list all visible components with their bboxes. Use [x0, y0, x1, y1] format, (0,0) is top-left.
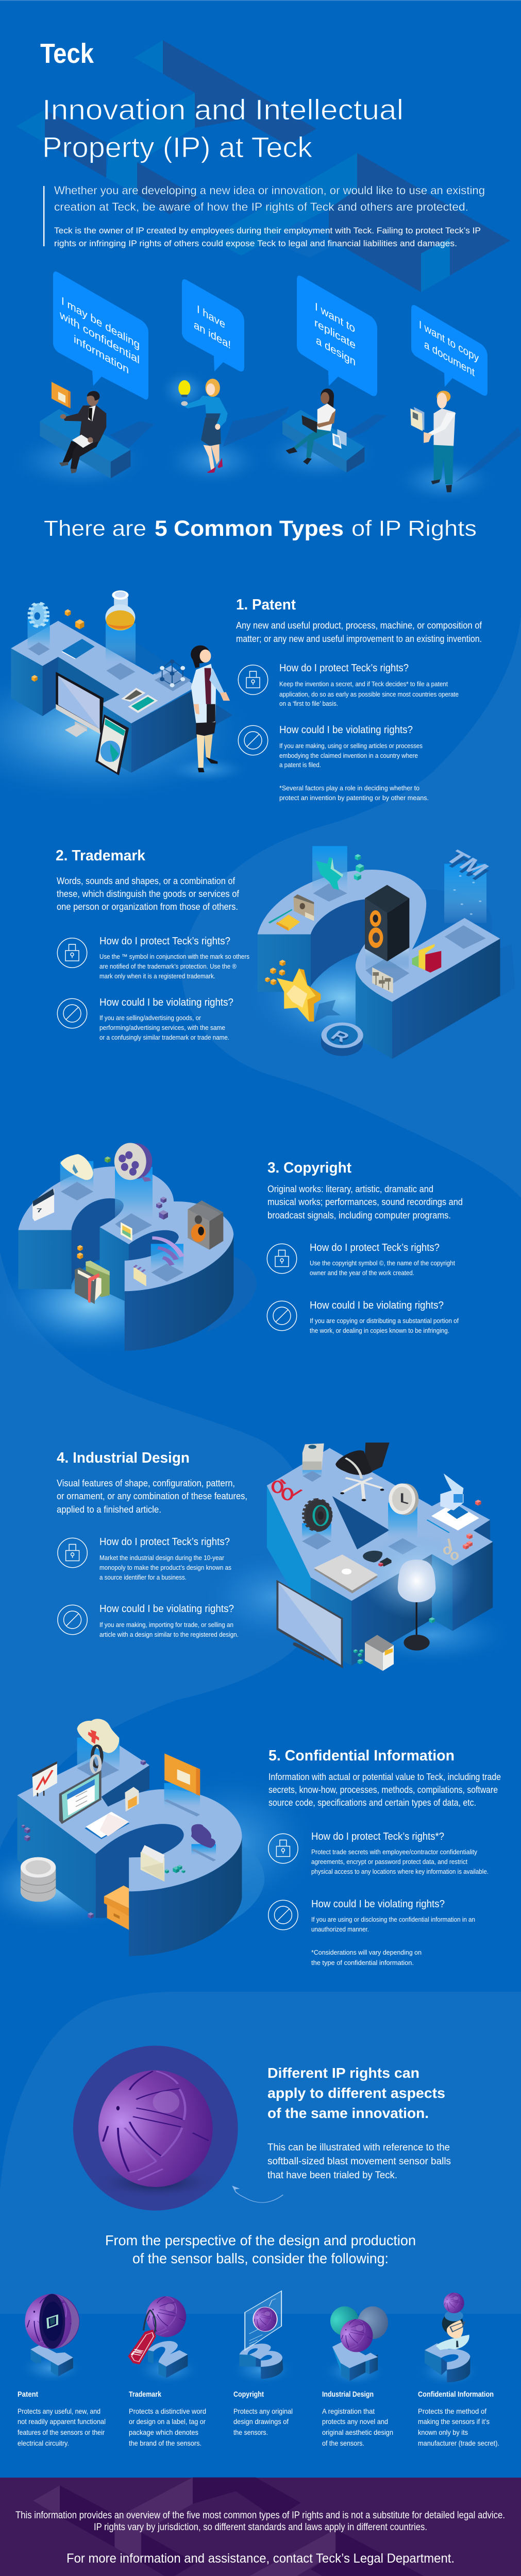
violate text: If you are making, importing for trade, or selling an — [99, 1621, 233, 1629]
icon: prohibited — [267, 1301, 297, 1331]
cubes — [355, 854, 361, 860]
panel: footer — [0, 2478, 521, 2576]
protect text: physical access to any locations where key information is available. — [311, 1868, 489, 1875]
confidential description: source code, specifications and certain types of data, etc. — [268, 1798, 476, 1808]
tablet chart — [95, 715, 129, 775]
copyright heading: 3. Copyright — [267, 1160, 351, 1176]
intro text block: creation at Teck, be aware of how the IP rights of Teck and others are protected. — [54, 200, 468, 213]
registered coin: R — [327, 1029, 354, 1047]
mixer — [372, 967, 393, 993]
protect text: How do I protect Teck’s rights*? — [311, 1831, 444, 1842]
confidential heading: 5. Confidential Information — [268, 1748, 455, 1764]
column: trademark: or design on a label, tag or — [129, 2417, 206, 2426]
violate text — [99, 1603, 239, 1638]
sensor ball illustration — [73, 2046, 238, 2211]
numeral 4 with three balls — [330, 2307, 388, 2381]
confidential footnote — [311, 1948, 422, 1967]
panel: four people with speech bubbles — [10, 272, 521, 503]
floor lamp — [416, 1602, 417, 1638]
puzzle piece — [191, 1824, 215, 1848]
patent footnote — [279, 784, 429, 802]
protect text: on a ‘first to file’ basis. — [279, 700, 338, 707]
teal cubes — [165, 1869, 169, 1873]
molecule — [162, 660, 183, 685]
numeral and ball illustrations — [20, 2291, 480, 2386]
intro text block: rights or infringing IP rights of others could expose Teck to legal and financial liabilities and damages. — [54, 239, 457, 248]
panel: five IP types applied to ball — [18, 2291, 499, 2447]
protect text: How do I protect Teck’s rights? — [99, 936, 230, 947]
section heading: 5 common types — [44, 516, 477, 541]
speaker — [365, 885, 409, 913]
violate text: How could I be violating rights? — [311, 1899, 445, 1910]
protect text: a source identifier for a business. — [99, 1574, 187, 1581]
copyright illustration: 7 — [37, 1208, 42, 1214]
top strip — [0, 0, 521, 1]
violate text — [311, 1899, 475, 1933]
column: trademark: Protects a distinctive word — [129, 2407, 206, 2415]
cubes — [65, 609, 71, 616]
bubble 3: I want to — [315, 300, 355, 335]
copyright description — [267, 1184, 463, 1221]
column: patent: features of the sensors or their — [18, 2428, 105, 2436]
purple cubes — [141, 1760, 146, 1765]
industrial design description: Visual features of shape, configuration, pattern, — [57, 1478, 235, 1488]
confidential footnote: the type of confidential information. — [311, 1959, 414, 1967]
woman with idea — [178, 380, 190, 396]
picture — [121, 1222, 132, 1241]
column: industrial design: of the sensors. — [322, 2439, 364, 2447]
violate text: the work, or dealing in copies known to be infringing. — [310, 1327, 449, 1334]
violate text: How could I be violating rights? — [279, 724, 413, 736]
column: trademark: the brand of the sensors. — [129, 2439, 201, 2447]
database — [21, 1868, 56, 1902]
industrial design heading: 4. Industrial Design — [57, 1450, 190, 1466]
violate text: If you are copying or distributing a substantial portion of — [310, 1317, 459, 1325]
trademark description: these, which distinguish the goods or services of — [57, 889, 240, 899]
column: industrial design: protects any novel and — [322, 2417, 388, 2426]
violate text: article with a design similar to the registered design. — [99, 1631, 239, 1638]
protect text: Market the industrial design during the 10-year — [99, 1554, 224, 1562]
protect text — [99, 936, 249, 980]
archive box — [104, 1886, 129, 1908]
column: trademark — [129, 2391, 206, 2447]
column: confidential information: known only by its — [418, 2428, 468, 2436]
trademark description: Words, sounds and shapes, or a combination of — [57, 876, 236, 886]
violate text: a patent is filed. — [279, 761, 321, 769]
intro text block — [43, 184, 485, 248]
industrial design description: or ornament, or any combination of these features, — [57, 1491, 247, 1501]
icon: lock — [57, 938, 87, 968]
confidential description — [268, 1772, 501, 1808]
icon: lock — [238, 665, 268, 694]
bubble 3: replicate — [314, 316, 356, 352]
dark gear — [304, 1499, 331, 1531]
protect text: owner and the year of the work created. — [310, 1269, 414, 1277]
logo: Teck: Teck — [40, 38, 94, 69]
panel: copyright — [0, 1143, 463, 1356]
copyright illustration — [0, 1143, 257, 1356]
numeral 2 with tag — [128, 2296, 188, 2378]
registered coin: R — [327, 1027, 354, 1045]
chair — [364, 1443, 390, 1475]
panel: patent — [0, 590, 482, 804]
TM block letters: TM — [439, 846, 495, 880]
scientist — [197, 734, 205, 768]
copyright description: musical works; performances, sound recordings and — [267, 1197, 463, 1207]
microscope — [431, 1503, 479, 1531]
code window — [32, 1189, 54, 1221]
violate text — [99, 997, 233, 1041]
column: confidential information — [418, 2391, 499, 2447]
copyright description: Original works: literary, artistic, dramatic and — [267, 1184, 433, 1194]
column: industrial design: original aesthetic design — [322, 2428, 393, 2436]
column: confidential information: making the sensors if it’s — [418, 2417, 490, 2426]
purple cubes — [160, 1197, 166, 1203]
bubble 3: a design — [316, 333, 356, 368]
industrial design illustration — [199, 1443, 512, 1671]
icon: prohibited — [58, 1605, 87, 1635]
protect text: monopoly to make the product’s design known as — [99, 1564, 231, 1571]
protect text: agreements, encrypt or password protect data, and restrict — [311, 1858, 467, 1866]
panel: trademark — [56, 846, 515, 1059]
explanation text — [267, 2142, 451, 2181]
bar chart blocks — [412, 955, 418, 967]
column: trademark: package which denotes — [129, 2428, 198, 2436]
perspective statement: of the sensor balls, consider the following: — [132, 2250, 389, 2266]
violate text: If you are making, using or selling articles or processes — [279, 742, 423, 750]
column: industrial design — [322, 2391, 393, 2447]
book — [62, 639, 95, 658]
protect text: mark only when it is a registered trademark. — [99, 973, 215, 980]
envelope — [52, 382, 71, 409]
bubble 2: an idea! — [194, 318, 231, 351]
man in suit — [62, 441, 83, 463]
chain — [91, 1745, 102, 1773]
confidential information illustration — [0, 1719, 319, 1956]
column: confidential information: Protects the method of — [418, 2407, 486, 2415]
section heading: 5 common types: There are — [44, 516, 146, 541]
column: trademark: Trademark — [129, 2391, 162, 2399]
perspective statement: From the perspective of the design and production — [105, 2232, 416, 2248]
patent description: Any new and useful product, process, machine, or composition of — [236, 620, 482, 631]
glasses — [273, 1480, 301, 1500]
violate text: performing/advertising services, with the same — [99, 1024, 225, 1031]
teal star — [316, 857, 343, 890]
column: copyright — [233, 2391, 293, 2436]
arrow — [232, 2185, 283, 2202]
bubble 1 — [53, 272, 148, 400]
protect text — [279, 663, 459, 707]
bubble 3 — [297, 276, 377, 396]
patent heading: 1. Patent — [236, 597, 296, 613]
column: patent: Protects any useful, new, and — [18, 2407, 100, 2415]
bubble 4 — [411, 305, 488, 396]
monitor — [75, 721, 87, 732]
disclaimer: IP rights vary by jurisdiction, so different standards and laws apply in different countries. — [94, 2522, 427, 2533]
numeral 2 with tag: TM — [128, 2348, 147, 2357]
patent footnote: *Several factors play a role in deciding whether to — [279, 784, 419, 792]
man with document — [414, 407, 424, 430]
jug — [302, 1444, 324, 1470]
title — [42, 93, 404, 163]
protect text: Use the ™ symbol in conjunction with the mark so others — [99, 953, 249, 960]
background wave: example — [0, 1992, 521, 2314]
trademark heading: 2. Trademark — [56, 848, 146, 864]
column: copyright: Copyright — [233, 2391, 264, 2399]
bubble 1: information — [74, 332, 129, 376]
open book — [85, 1812, 129, 1839]
bench 3 — [282, 410, 364, 461]
column: copyright: Protects any original — [233, 2407, 293, 2415]
protect text: Keep the invention a secret, and if Teck decides* to file a patent — [279, 681, 448, 688]
protect text — [310, 1242, 455, 1277]
icon: prohibited — [57, 998, 87, 1028]
title: Innovation and Intellectual — [42, 93, 404, 126]
violate text: unauthorized manner. — [311, 1926, 369, 1933]
column: patent — [18, 2391, 106, 2447]
column: industrial design: A registration that — [322, 2407, 375, 2415]
heading: different IP rights: of the same innovation. — [267, 2105, 429, 2121]
panel: industrial design — [57, 1443, 512, 1671]
bubble 2 — [182, 279, 244, 371]
bubble 4: I want to copy — [419, 318, 479, 365]
grey speaker — [188, 1200, 223, 1221]
violate text: If you are selling/advertising goods, or — [99, 1014, 201, 1022]
phones — [121, 688, 145, 702]
column: copyright: design drawings of — [233, 2417, 289, 2426]
icon: prohibited — [268, 1900, 298, 1930]
clock — [392, 1483, 418, 1515]
protect text: How do I protect Teck’s rights? — [99, 1536, 230, 1548]
industrial design description — [57, 1478, 247, 1515]
people illustrations — [10, 369, 521, 503]
copyright description: broadcast signals, including computer programs. — [267, 1210, 451, 1221]
violate text — [279, 724, 423, 769]
header chevron pattern — [16, 40, 510, 292]
intro text block: Teck is the owner of IP created by employees during their employment with Teck. Failing to protect Teck’s IP — [54, 226, 481, 235]
section heading: 5 common types: 5 Common Types — [155, 516, 344, 541]
column: patent: not readily apparent functional — [18, 2417, 106, 2426]
cloud with cross — [77, 1719, 119, 1753]
title: Property (IP) at Teck — [42, 131, 313, 163]
violate text: embodying the claimed invention in a country where — [279, 752, 418, 759]
sim card — [125, 1787, 139, 1811]
books — [86, 1264, 110, 1297]
protect text: application, do so as early as possible since most countries operate — [279, 691, 459, 698]
film reel — [120, 1143, 152, 1179]
violate text: How could I be violating rights? — [99, 997, 233, 1008]
bubble 4: a document — [424, 337, 475, 379]
column: confidential information: manufacturer (trade secret). — [418, 2439, 499, 2447]
confidential footnote: *Considerations will vary depending on — [311, 1948, 422, 1956]
violate text: How could I be violating rights? — [310, 1300, 444, 1311]
column: copyright: the sensors. — [233, 2428, 268, 2436]
icon: prohibited — [238, 725, 268, 755]
violate text: If you are using or disclosing the confidential information in an — [311, 1916, 475, 1923]
scissors — [444, 1539, 458, 1560]
bubble 2: I have — [197, 302, 225, 331]
column: confidential information: Confidential Information — [418, 2391, 494, 2399]
intro text block: Whether you are developing a new idea or innovation, or would like to use an existing — [54, 184, 485, 197]
contact line: For more information and assistance, contact Teck’s Legal Department. — [66, 2551, 455, 2566]
flask — [114, 598, 128, 608]
gear — [30, 603, 47, 626]
heading: different IP rights: Different IP rights can — [267, 2065, 419, 2081]
registered coin — [321, 1023, 363, 1056]
industrial design description: applied to a finished article. — [57, 1504, 161, 1515]
icon: lock — [267, 1244, 297, 1274]
protect text — [311, 1831, 489, 1875]
protect text: are notified of the trademark’s protection. Use the ® — [99, 963, 237, 970]
cloud upload — [60, 1154, 93, 1180]
TM block letters: TM — [439, 851, 495, 884]
explanation text: softball-sized blast movement sensor balls — [267, 2156, 451, 2167]
patent description: matter; or any new and useful improvement to an existing invention. — [236, 634, 482, 644]
section heading: 5 common types: of IP Rights — [351, 516, 477, 541]
protect text: Protect trade secrets with employee/contractor confidentiality — [311, 1849, 478, 1856]
column: patent: electrical circuitry. — [18, 2439, 69, 2447]
patent description — [236, 620, 482, 644]
numeral 1 with cut ball — [25, 2294, 79, 2377]
envelope — [164, 1753, 200, 1796]
open envelope — [141, 1852, 164, 1882]
lamp halo — [361, 1534, 474, 1619]
trademark description — [57, 876, 240, 912]
violate text — [310, 1300, 459, 1334]
heading: different IP rights — [267, 2065, 445, 2121]
trademark description: one person or organization from those of others. — [57, 902, 238, 912]
woman with tablet — [337, 429, 347, 446]
panel: confidential information — [0, 1719, 501, 1967]
patent footnote: protect an invention by patenting or by other means. — [279, 794, 429, 802]
background wave: trademark — [182, 616, 521, 1198]
icon: lock — [268, 1834, 298, 1863]
laptop — [314, 1554, 378, 1594]
numeral 5 with thinker — [425, 2293, 470, 2382]
panel: sensor ball example — [73, 2046, 451, 2266]
column: patent: Patent — [18, 2391, 38, 2399]
wifi arcs — [152, 1238, 182, 1265]
protect text: Use the copyright symbol ©, the name of the copyright — [310, 1260, 455, 1267]
icon: lock — [58, 1538, 87, 1568]
bench 1 — [40, 409, 130, 462]
violate text: or a confusingly similar trademark or trade name. — [99, 1034, 229, 1041]
protect text: How do I protect Teck’s rights? — [279, 663, 409, 674]
trademark illustration — [243, 846, 515, 1059]
patent illustration — [0, 590, 256, 804]
protect text: How do I protect Teck’s rights? — [310, 1242, 440, 1253]
violate text: How could I be violating rights? — [99, 1603, 234, 1615]
explanation text: that have been trialed by Teck. — [267, 2170, 397, 2181]
toaster — [365, 1635, 394, 1653]
tablet — [59, 1770, 102, 1824]
television — [293, 1642, 324, 1660]
notepad — [133, 1266, 146, 1286]
mouse & adapter — [363, 1551, 382, 1563]
gold cubes — [77, 1245, 83, 1251]
column: industrial design: Industrial Design — [322, 2391, 374, 2399]
disclaimer — [15, 2510, 505, 2533]
address book — [293, 897, 314, 921]
perspective statement — [105, 2232, 416, 2266]
bubble 1: with confidential — [59, 308, 140, 366]
flip chart — [32, 1761, 57, 1797]
numeral 3 with design — [239, 2291, 283, 2379]
background wave: industrial design — [0, 1252, 314, 1848]
explanation text: This can be illustrated with reference to the — [267, 2142, 450, 2153]
protect text — [99, 1536, 231, 1581]
footer chevron pattern — [33, 2478, 465, 2576]
bubble 1: I may be dealing — [61, 294, 140, 351]
heading: different IP rights: apply to different aspects — [267, 2085, 445, 2101]
gold star — [284, 969, 321, 1022]
